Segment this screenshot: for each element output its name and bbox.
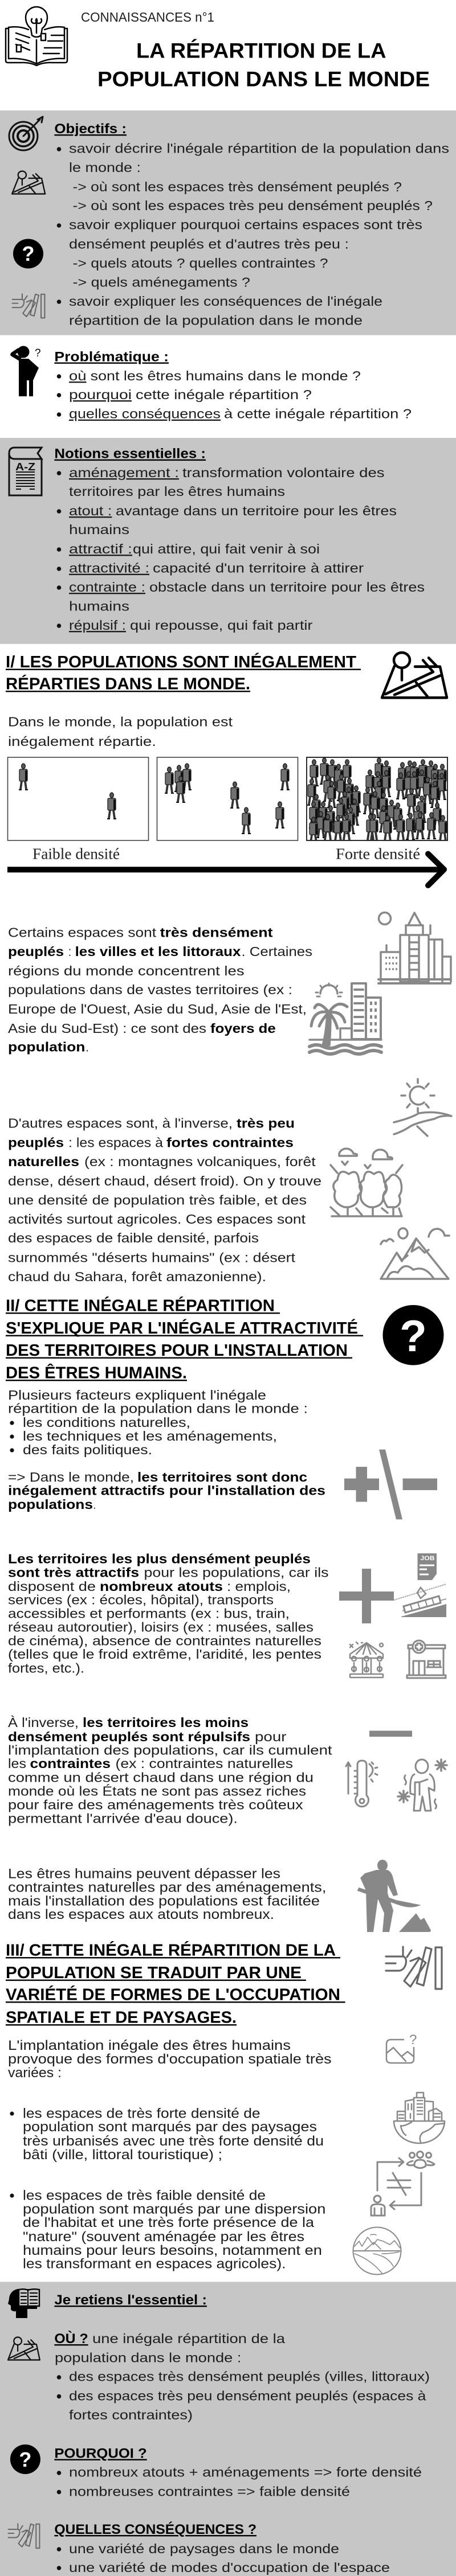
intro text: Dans le monde, la population est bbox=[8, 715, 233, 729]
text: densely populated: Asie du Sud-Est) : ce sont des bbox=[8, 1021, 206, 1036]
text: human adaptation: contraintes naturelles par des aménagements, bbox=[8, 1880, 326, 1895]
text: attractive territories: (telles que le froid extrême, l'aridité, les pentes bbox=[8, 1647, 321, 1662]
text: sparsely populated: activités surtout agricoles. Ces espaces sont bbox=[8, 1212, 306, 1227]
objectives list bbox=[57, 141, 449, 328]
text: low density spaces: "nature" (souvent aménagée par les êtres bbox=[23, 2229, 304, 2245]
text: sparsely populated: : les espaces à bbox=[68, 1135, 164, 1150]
definitions list: qui attire, qui fait venir à soi bbox=[133, 542, 320, 556]
text: human adaptation: mais l'installation des populations est facilitée bbox=[8, 1894, 320, 1909]
definitions list: humains bbox=[69, 522, 129, 537]
text: high density spaces: population sont marqués par des paysages bbox=[23, 2119, 317, 2135]
questions list: où bbox=[69, 368, 87, 383]
text: sparsely populated: très peu bbox=[237, 1116, 295, 1131]
icon: A-Z dictionary: A-Z bbox=[15, 461, 35, 473]
definitions list: attractivité : bbox=[69, 561, 149, 576]
icon: map bbox=[8, 2337, 40, 2360]
text: conclusion: les territoires sont donc bbox=[137, 1470, 307, 1484]
panel: problématique bbox=[10, 346, 412, 421]
section II heading: S'EXPLIQUE PAR L'INÉGALE ATTRACTIVITÉ bbox=[6, 1318, 358, 1338]
text: repulsive territories: pour faire des aménagements très coûteux bbox=[8, 1798, 303, 1812]
text: densely populated: les villes et les littoraux bbox=[75, 944, 241, 959]
heading: objectifs: Objectifs : bbox=[54, 121, 127, 137]
text: attractive territories: disposent de bbox=[8, 1579, 96, 1594]
text: repulsive territories: pour bbox=[255, 1729, 287, 1744]
text: human adaptation: dans les espaces aux atouts nombreux. bbox=[8, 1907, 274, 1922]
text: factors: répartition de la population dans le monde : bbox=[8, 1401, 308, 1416]
section I heading: I/ LES POPULATIONS SONT INÉGALEMENT bbox=[6, 652, 356, 671]
icon: job offer: JOB bbox=[421, 1555, 435, 1562]
definitions list: répulsif : bbox=[69, 618, 126, 633]
title bbox=[97, 39, 430, 91]
questions list: cette inégale répartition ? bbox=[136, 387, 312, 402]
definitions list: qui repousse, qui fait partir bbox=[130, 618, 313, 633]
text: low density spaces: les espaces de très faible densité de bbox=[23, 2188, 266, 2204]
icon: question mark: ? bbox=[22, 242, 34, 265]
objectives list: densément peuplés et d'autres très peu : bbox=[69, 237, 349, 252]
heading: essentiel: Je retiens l'essentiel : bbox=[54, 2292, 207, 2308]
text: conclusion: . bbox=[93, 1497, 96, 1512]
title: LA RÉPARTITION DE LA bbox=[136, 39, 386, 63]
definitions list: contrainte : bbox=[69, 580, 145, 594]
text: high density spaces bbox=[10, 2106, 324, 2163]
text: high density spaces: très urbanisés avec une très forte densité du bbox=[23, 2134, 324, 2149]
text: sparsely populated: une densité de population très faible, et des bbox=[8, 1193, 307, 1208]
section II heading: DES ÊTRES HUMAINS. bbox=[6, 1363, 187, 1382]
definitions list: avantage dans un territoire pour les êtres bbox=[116, 503, 397, 518]
text: high density spaces: les espaces de très forte densité de bbox=[23, 2106, 260, 2122]
box: medium density bbox=[157, 757, 298, 840]
text: densely populated: . bbox=[85, 1040, 89, 1055]
text: factors: les conditions naturelles, bbox=[23, 1415, 190, 1430]
text: spatial forms intro bbox=[8, 2038, 332, 2081]
objectives list: le monde : bbox=[69, 160, 141, 175]
icon: carousel bbox=[350, 1642, 383, 1677]
text: densely populated: régions du monde concentrent les bbox=[8, 963, 245, 978]
definitions list: territoires par les êtres humains bbox=[69, 484, 285, 499]
icon: thinking person: ? bbox=[35, 347, 41, 359]
section I heading bbox=[6, 652, 361, 694]
definitions list: aménagement : bbox=[69, 465, 179, 480]
text: sparsely populated: D'autres espaces sont, à l'inverse, bbox=[8, 1116, 233, 1131]
questions list: pourquoi bbox=[69, 387, 132, 402]
text: repulsive territories: les territoires les moins bbox=[83, 1715, 249, 1730]
questions list bbox=[57, 368, 412, 421]
icon: minus bbox=[369, 1731, 412, 1737]
icon: A-Z dictionary bbox=[9, 448, 42, 495]
label: faible densité: Faible densité bbox=[32, 845, 120, 862]
text: repulsive territories: densément peuplés sont répulsifs bbox=[8, 1729, 250, 1744]
section III heading: SPATIALE ET DE PAYSAGES. bbox=[6, 2009, 237, 2027]
text: factors: les techniques et les aménagements, bbox=[23, 1429, 277, 1443]
icon: book and light bulb bbox=[6, 7, 67, 65]
heading: problématique: Problématique : bbox=[54, 349, 169, 364]
section III heading bbox=[6, 1941, 345, 2027]
text: attractive territories: fortes, etc.). bbox=[8, 1660, 84, 1675]
text: spatial forms intro: provoque des formes d'occupation spatiale très bbox=[8, 2052, 332, 2067]
block: où: population dans le monde : bbox=[55, 2351, 242, 2365]
text: densely populated: . Certaines bbox=[242, 944, 312, 959]
text: spatial forms intro: variées : bbox=[8, 2065, 62, 2081]
icon: hospital bbox=[407, 1640, 446, 1678]
objectives list: répartition de la population dans le monde bbox=[69, 313, 363, 328]
questions list: quelles conséquences bbox=[69, 407, 221, 421]
panel: notions essentielles bbox=[0, 438, 456, 644]
text: sparsely populated bbox=[8, 1116, 321, 1284]
text: attractive territories: : emplois, bbox=[227, 1579, 291, 1594]
block: conséquences: QUELLES CONSÉQUENCES ? bbox=[54, 2521, 256, 2537]
block: conséquences bbox=[54, 2521, 390, 2575]
objectives list: -> où sont les espaces très peu densément peuplés ? bbox=[73, 198, 433, 213]
text: sparsely populated: (ex : montagnes volcaniques, forêt bbox=[84, 1154, 316, 1169]
text: sparsely populated: des espaces de faible densité, parfois bbox=[8, 1230, 259, 1245]
text: densely populated: Europe de l'Ouest, Asie du Sud, Asie de l'Est, bbox=[8, 1002, 307, 1016]
section III heading: POPULATION SE TRADUIT PAR UNE bbox=[6, 1964, 302, 1982]
icon: falling dominoes bbox=[386, 1947, 442, 1989]
text: sparsely populated: peuplés bbox=[8, 1135, 64, 1150]
icon: question mark bbox=[10, 2444, 40, 2474]
text: factors bbox=[8, 1388, 308, 1457]
text: high density spaces: bâti (ville, littoral touristique) ; bbox=[23, 2147, 222, 2163]
text: attractive territories: pour les populations, car ils bbox=[144, 1565, 328, 1580]
icon: thinking person bbox=[10, 346, 41, 396]
panel: objectifs bbox=[0, 110, 456, 335]
text: low density spaces bbox=[10, 2188, 325, 2272]
text: repulsive territories bbox=[8, 1715, 332, 1826]
icon: skyline bbox=[378, 912, 451, 983]
text: attractive territories: de cinéma), absence de contraintes naturelles bbox=[8, 1633, 321, 1648]
block: où bbox=[54, 2331, 430, 2422]
block: où: une inégale répartition de la bbox=[92, 2331, 286, 2346]
text: densely populated: foyers de bbox=[210, 1021, 276, 1036]
text: spatial forms intro: L'implantation inégale des êtres humains bbox=[8, 2038, 291, 2053]
objectives list: savoir expliquer les conséquences de l'inégale bbox=[69, 294, 382, 309]
definitions list: humains bbox=[69, 599, 129, 614]
text: attractive territories bbox=[8, 1552, 328, 1675]
icon: sun and dunes bbox=[394, 1079, 451, 1136]
icon: map bbox=[382, 653, 447, 698]
icon: forest bbox=[331, 1148, 402, 1216]
definitions list: transformation volontaire des bbox=[182, 465, 384, 480]
definitions list: attractif : bbox=[69, 542, 132, 556]
icon: plus slash minus bbox=[344, 1450, 437, 1519]
text: factors: Plusieurs facteurs expliquent l'inégale bbox=[8, 1388, 266, 1402]
block: conséquences: une variété de paysages dans le monde bbox=[69, 2541, 339, 2556]
intro text: inégalement répartie. bbox=[8, 734, 156, 749]
text: attractive territories: nombreux atouts bbox=[100, 1579, 223, 1594]
objectives list: -> où sont les espaces très densément peuplés ? bbox=[73, 179, 402, 194]
block: pourquoi: nombreux atouts + aménagements => forte densité bbox=[69, 2465, 422, 2480]
icon: big question mark: ? bbox=[400, 1311, 427, 1361]
text: human adaptation bbox=[8, 1867, 326, 1922]
series label: CONNAISSANCES n°1 bbox=[81, 10, 214, 24]
text: repulsive territories: (ex : contraintes naturelles bbox=[115, 1756, 293, 1771]
text: human adaptation: Les êtres humains peuvent dépasser les bbox=[8, 1867, 280, 1881]
section II heading bbox=[6, 1296, 363, 1382]
text: repulsive territories: permettant l'arrivée d'eau douce). bbox=[8, 1811, 238, 1826]
text: repulsive territories: À l'inverse, bbox=[8, 1715, 79, 1730]
text: densely populated: Certains espaces sont bbox=[8, 925, 157, 940]
icon: mountains bbox=[381, 1228, 449, 1279]
text: densely populated: population bbox=[8, 1040, 85, 1055]
block: pourquoi bbox=[54, 2446, 422, 2499]
text: factors: des faits politiques. bbox=[23, 1442, 152, 1457]
objectives list: -> quels aménegaments ? bbox=[73, 275, 250, 290]
icon: landscape question bbox=[386, 2032, 417, 2063]
icon: question mark: ? bbox=[19, 2448, 31, 2471]
icon: big plus bbox=[339, 1569, 394, 1623]
panel: je retiens l'essentiel bbox=[0, 2282, 456, 2576]
text: sparsely populated: chaud du Sahara, forêt amazonienne). bbox=[8, 1269, 266, 1284]
block: où: fortes contraintes) bbox=[69, 2407, 193, 2422]
block: conséquences: une variété de modes d'occupation de l'espace bbox=[69, 2560, 390, 2575]
section I heading: RÉPARTIES DANS LE MONDE. bbox=[6, 674, 250, 694]
text: densely populated: peuplés bbox=[8, 944, 64, 959]
density diagram bbox=[7, 757, 447, 885]
text: low density spaces: population sont marqués par une dispersion bbox=[23, 2202, 325, 2217]
text: densely populated: populations dans de vastes territoires (ex : bbox=[8, 982, 292, 997]
text: densely populated: : bbox=[68, 944, 71, 959]
text: attractive territories: services (ex : écoles, hôpital), transports bbox=[8, 1592, 274, 1607]
definitions list: atout : bbox=[69, 503, 112, 518]
block: pourquoi: nombreuses contraintes => faible densité bbox=[69, 2484, 350, 2499]
icon: question mark bbox=[13, 239, 43, 269]
block: pourquoi: POURQUOI ? bbox=[54, 2446, 147, 2462]
text: repulsive territories: comme un désert chaud dans une région du bbox=[8, 1770, 314, 1785]
questions list: sont les êtres humains dans le monde ? bbox=[91, 368, 361, 383]
icon: landscape medallion bbox=[353, 2228, 401, 2274]
block: où: OÙ ? bbox=[54, 2331, 88, 2347]
definitions list: obstacle dans un territoire pour les êtres bbox=[149, 580, 425, 594]
text: sparsely populated: surnommés "déserts humains" (ex : désert bbox=[8, 1250, 296, 1265]
text: conclusion: populations bbox=[8, 1497, 93, 1512]
text: sparsely populated: dense, désert chaud, désert froid). On y trouve bbox=[8, 1174, 321, 1188]
text: conclusion: inégalement attractifs pour l'installation des bbox=[8, 1483, 325, 1498]
text: low density spaces: de l'habitat et une très forte présence de la bbox=[23, 2215, 314, 2230]
icon: falling dominoes bbox=[9, 2524, 39, 2548]
title: POPULATION DANS LE MONDE bbox=[97, 67, 430, 91]
heading: notions: Notions essentielles : bbox=[54, 446, 206, 462]
objectives list: -> quels atouts ? quelles contraintes ? bbox=[73, 256, 328, 270]
arrow bbox=[7, 854, 444, 885]
text: attractive territories: sont très attractifs bbox=[8, 1565, 139, 1580]
label: forte densité: Forte densité bbox=[336, 845, 420, 862]
text: densely populated bbox=[8, 925, 312, 1055]
icon: head with book bbox=[8, 2289, 39, 2318]
block: où: des espaces très peu densément peuplés (espaces à bbox=[69, 2389, 426, 2403]
section II heading: II/ CETTE INÉGALE RÉPARTITION bbox=[6, 1296, 275, 1315]
icon: unequal people bbox=[371, 2151, 434, 2216]
text: low density spaces: humains pour leurs besoins, notamment en bbox=[23, 2243, 322, 2258]
icon: coastal city bbox=[310, 983, 381, 1054]
intro text bbox=[8, 715, 233, 749]
definitions list bbox=[57, 465, 425, 633]
text: repulsive territories: l'implantation des populations, car ils cumulent bbox=[8, 1743, 332, 1758]
text: repulsive territories: monde où les États ne sont pas assez riches bbox=[8, 1783, 306, 1798]
text: attractive territories: Les territoires les plus densément peuplés bbox=[8, 1552, 311, 1566]
icon: falling dominoes bbox=[13, 294, 44, 318]
text: repulsive territories: les bbox=[8, 1756, 26, 1771]
questions list: à cette inégale répartition ? bbox=[224, 407, 412, 421]
section II heading: DES TERRITOIRES POUR L'INSTALLATION bbox=[6, 1342, 348, 1360]
box: high density bbox=[307, 757, 447, 843]
section III heading: III/ CETTE INÉGALE RÉPARTITION DE LA bbox=[6, 1941, 336, 1960]
icon: big question mark bbox=[383, 1305, 443, 1365]
text: attractive territories: réseau autoroutier), loisirs (ex : musées, salles bbox=[8, 1620, 314, 1635]
icon: funicular bbox=[394, 1584, 446, 1617]
icon: map bbox=[12, 171, 45, 194]
text: low density spaces: les transformant en espaces agricoles). bbox=[23, 2257, 286, 2272]
box: low density bbox=[8, 757, 148, 840]
icon: landscape question: ? bbox=[409, 2032, 417, 2048]
text: attractive territories: accessibles et performants (ex : bus, train, bbox=[8, 1606, 290, 1621]
icon: city on globe bbox=[394, 2093, 445, 2143]
icon: thermometer bbox=[346, 1761, 377, 1807]
header bbox=[6, 7, 430, 91]
definitions list: capacité d'un territoire à attirer bbox=[153, 561, 364, 576]
objectives list: savoir décrire l'inégale répartition de la population dans bbox=[69, 141, 449, 156]
text: sparsely populated: fortes contraintes bbox=[166, 1135, 294, 1150]
text: conclusion bbox=[8, 1470, 325, 1512]
text: repulsive territories: contraintes bbox=[30, 1756, 111, 1771]
section III heading: VARIÉTÉ DE FORMES DE L'OCCUPATION bbox=[6, 1984, 340, 2004]
objectives list: savoir expliquer pourquoi certains espaces sont très bbox=[69, 218, 422, 232]
icon: person in the cold bbox=[398, 1759, 447, 1811]
text: densely populated: très densément bbox=[160, 925, 273, 940]
text: sparsely populated: naturelles bbox=[8, 1154, 79, 1169]
text: conclusion: => Dans le monde, bbox=[8, 1470, 134, 1484]
icon: worker with shovel bbox=[358, 1860, 431, 1932]
block: où: des espaces très densément peuplés (villes, littoraux) bbox=[69, 2369, 430, 2384]
icon: job offer bbox=[417, 1553, 437, 1580]
icon: target bbox=[9, 117, 43, 150]
